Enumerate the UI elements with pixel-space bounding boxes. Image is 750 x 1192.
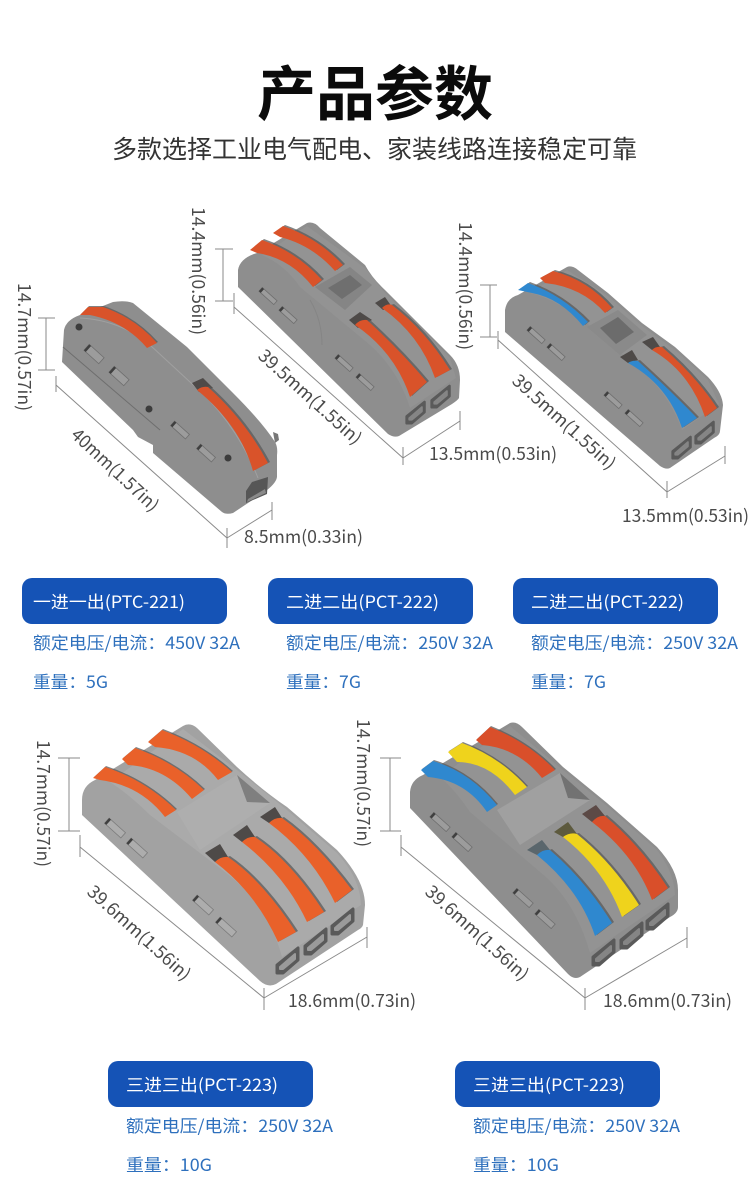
dimensions: connector 2: 13.5mm(0.53in) xyxy=(429,441,557,466)
dimensions: connector 5: 39.6mm(1.56in) xyxy=(420,879,535,986)
dimensions: connector 2 xyxy=(186,207,557,466)
dimensions: connector 3: 39.5mm(1.55in) xyxy=(507,368,622,475)
connector: two-way PCT-222 blue and orange xyxy=(505,266,723,469)
connector: single-way PTC-221 xyxy=(62,301,279,514)
spec card: PCT-222 orange xyxy=(268,578,494,693)
dimensions: connector 5 xyxy=(351,719,732,1013)
spec card: PCT-222 orange: 额定电压/电流：250V 32A xyxy=(286,629,494,654)
spec card: PCT-223 orange: 额定电压/电流：250V 32A xyxy=(126,1112,334,1137)
spec card: PCT-223 orange: 重量：10G xyxy=(126,1151,212,1176)
dimensions: connector 1: 14.7mm(0.57in) xyxy=(12,283,37,411)
spec card: PTC-221: 额定电压/电流：450V 32A xyxy=(33,629,241,654)
dimensions: connector 4: 39.6mm(1.56in) xyxy=(82,879,197,986)
spec card: PCT-223 tricolour: 三进三出(PCT-223) xyxy=(473,1071,625,1096)
spec card: PCT-223 orange xyxy=(108,1061,334,1176)
subtitle: 多款选择工业电气配电、家装线路连接稳定可靠 xyxy=(112,130,637,166)
dimensions: connector 3: 14.4mm(0.56in) xyxy=(453,222,478,350)
dimensions: connector 1 xyxy=(12,283,363,549)
dimensions: connector 1: 40mm(1.57in) xyxy=(66,422,165,517)
dimensions: connector 3: 13.5mm(0.53in) xyxy=(622,503,749,528)
dimensions: connector 1: 8.5mm(0.33in) xyxy=(244,524,363,549)
spec card: PTC-221 xyxy=(22,578,241,693)
connector: three-way PCT-223 blue yellow red xyxy=(410,722,678,978)
spec card: PCT-222 blue xyxy=(513,578,739,693)
spec card: PCT-222 orange: 重量：7G xyxy=(286,668,361,693)
spec card: PCT-222 orange: 二进二出(PCT-222) xyxy=(286,588,439,613)
spec card: PTC-221: 一进一出(PTC-221) xyxy=(33,588,185,613)
spec card: PCT-223 tricolour: 额定电压/电流：250V 32A xyxy=(473,1112,681,1137)
connector: two-way PCT-222 orange xyxy=(238,223,460,437)
spec card: PCT-223 tricolour xyxy=(455,1061,681,1176)
dimensions: connector 4: 14.7mm(0.57in) xyxy=(31,740,56,867)
spec card: PTC-221: 重量：5G xyxy=(33,668,108,693)
dimensions: connector 2: 39.5mm(1.55in) xyxy=(253,343,368,450)
spec card: PCT-222 blue: 额定电压/电流：250V 32A xyxy=(531,629,739,654)
dimensions: connector 5: 18.6mm(0.73in) xyxy=(603,988,732,1013)
dimensions: connector 5: 14.7mm(0.57in) xyxy=(351,719,376,847)
connector: three-way PCT-223 orange xyxy=(82,724,365,985)
spec card: PCT-222 blue: 二进二出(PCT-222) xyxy=(531,588,684,613)
dimensions: connector 2: 14.4mm(0.56in) xyxy=(186,207,211,335)
title: 产品参数 xyxy=(257,47,493,132)
dimensions: connector 4 xyxy=(31,740,416,1013)
spec card: PCT-223 tricolour: 重量：10G xyxy=(473,1151,559,1176)
spec card: PCT-223 orange: 三进三出(PCT-223) xyxy=(126,1071,278,1096)
spec card: PCT-222 blue: 重量：7G xyxy=(531,668,606,693)
dimensions: connector 4: 18.6mm(0.73in) xyxy=(288,988,416,1013)
dimensions: connector 3 xyxy=(453,222,749,528)
